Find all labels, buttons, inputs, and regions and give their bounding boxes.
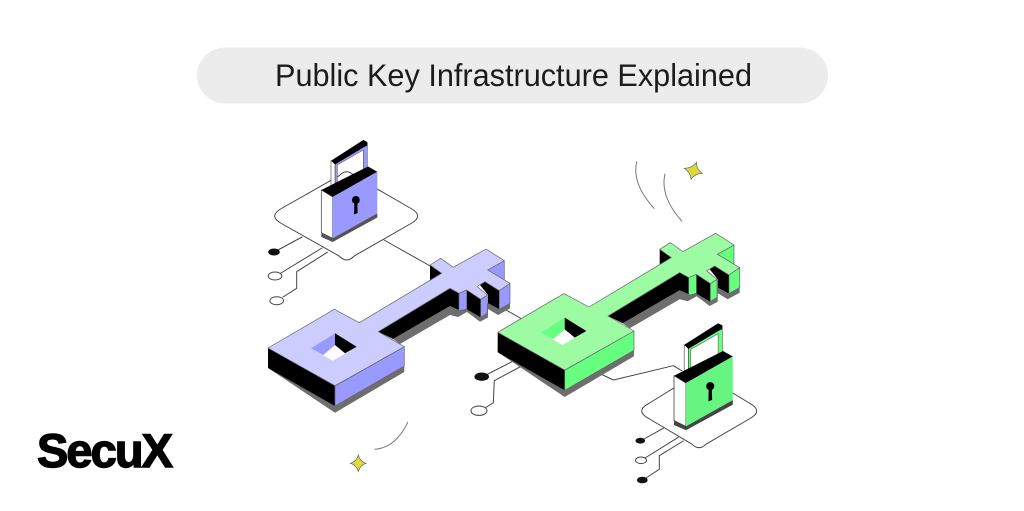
key: lavender [268, 249, 510, 413]
lock top [674, 351, 733, 383]
key top face [498, 233, 740, 370]
key hole [311, 333, 357, 361]
title pill: Public Key Infrastructure Explained [275, 57, 752, 93]
key black walls [498, 249, 729, 390]
connector: green key to green lock [597, 366, 682, 380]
key shadow [498, 287, 740, 397]
lock left side [674, 376, 686, 426]
connector: lavender lock to lavender key [384, 240, 432, 267]
icon: sparkle top right [684, 162, 702, 179]
circuit leads: green lock [636, 428, 683, 483]
padlock: lavender [321, 140, 377, 242]
arcs: top right motion lines [636, 162, 682, 221]
padlock: green [674, 323, 733, 430]
key shadow [268, 303, 510, 413]
key top face [268, 249, 510, 386]
lock left side [321, 190, 333, 238]
key: green [498, 233, 740, 397]
arc: bottom motion line [375, 422, 408, 449]
lock top [321, 166, 377, 197]
shackle [684, 323, 722, 377]
icon: sparkle bottom [350, 455, 366, 472]
lock base strip [321, 213, 377, 242]
circuit leads: green key [471, 362, 522, 415]
keyhole [352, 196, 360, 214]
lock base strip [674, 400, 733, 430]
title pill [197, 48, 828, 104]
key black walls [268, 265, 499, 406]
lock front [333, 172, 377, 238]
connector: lavender key to green key [499, 306, 522, 319]
key hole [541, 318, 586, 345]
key lit walls [335, 261, 510, 406]
circuit leads: lavender lock [268, 237, 327, 305]
platform: green lock [642, 373, 757, 448]
lock front [686, 356, 733, 426]
platform: lavender lock [275, 172, 418, 260]
shackle [331, 140, 367, 191]
logo: SecuX: SecuX [37, 424, 173, 477]
keyhole [706, 382, 714, 401]
key lit walls [565, 245, 740, 390]
